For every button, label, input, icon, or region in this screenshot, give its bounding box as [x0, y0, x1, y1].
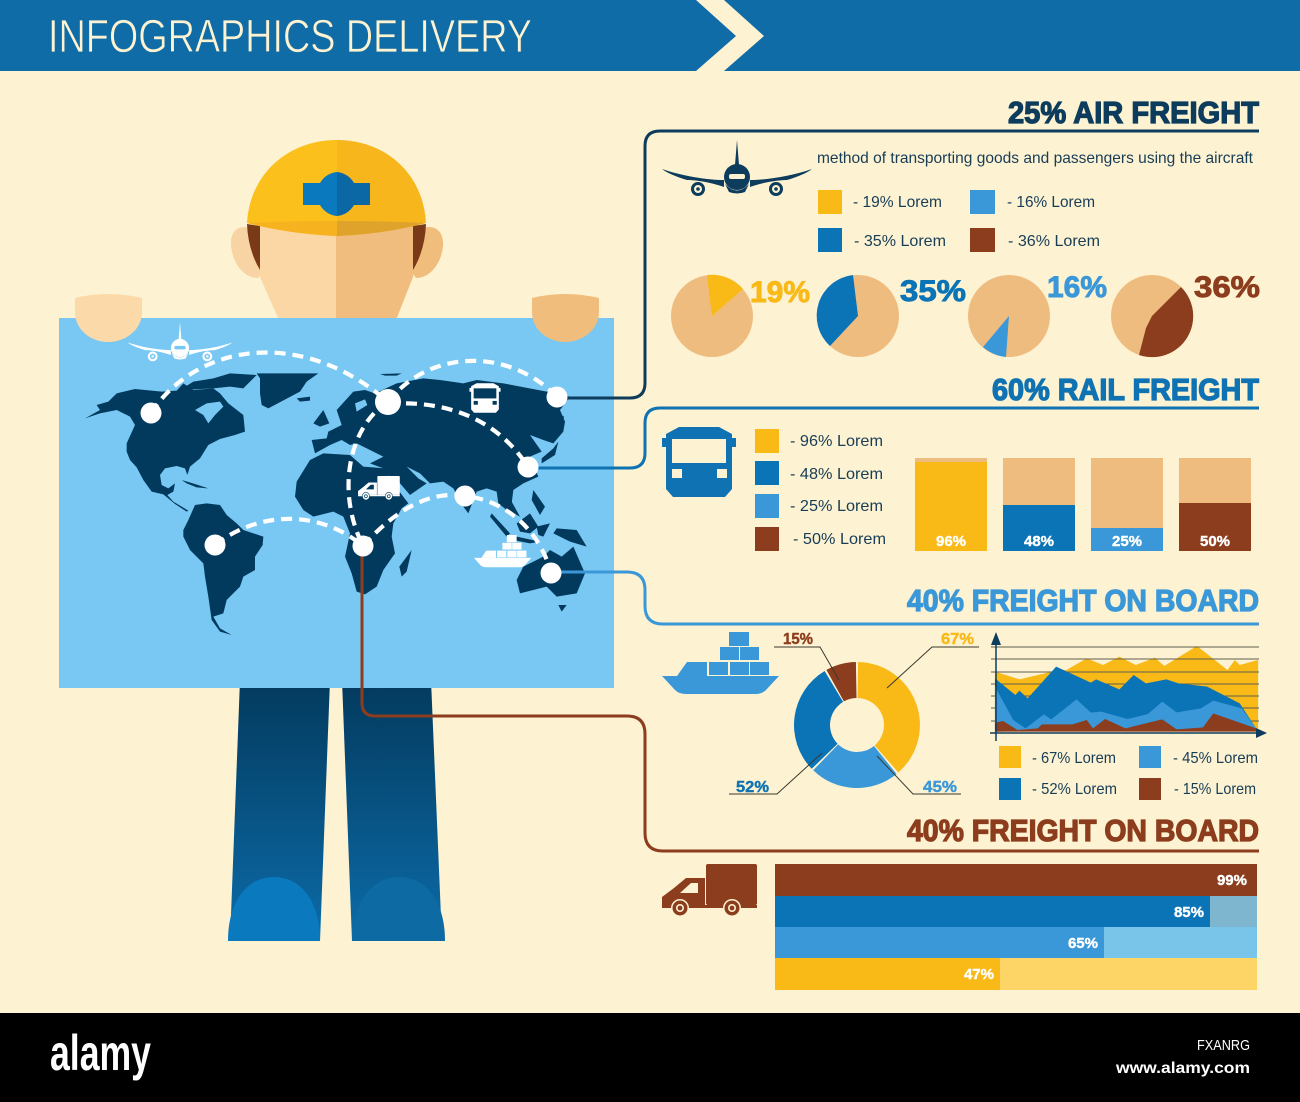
routes on map [140, 353, 568, 584]
legend [999, 746, 1258, 800]
donut chart [794, 662, 920, 788]
horizontal bars: 65% [1068, 935, 1098, 952]
heading: 40% FREIGHT ON BOARD [907, 813, 1259, 848]
legend: - 67% Lorem [1032, 750, 1116, 767]
map poster [59, 318, 614, 688]
stacked bars: 50% [1200, 533, 1230, 550]
legend: - 15% Lorem [1174, 781, 1256, 798]
legend: - 19% Lorem [853, 194, 942, 211]
footer band [0, 1013, 1300, 1102]
pie 35% [817, 275, 966, 357]
horizontal bars: 85% [1174, 904, 1204, 921]
area chart [990, 632, 1267, 741]
horizontal bars: 47% [964, 966, 994, 983]
legend: - 35% Lorem [854, 233, 946, 250]
donut labels: 45% [923, 779, 957, 796]
header banner: INFOGRAPHICS DELIVERY [48, 10, 532, 62]
helmet [247, 140, 426, 236]
legend: - 36% Lorem [1008, 233, 1100, 250]
worker figure [59, 140, 614, 941]
header banner [0, 0, 1300, 71]
legend: - 16% Lorem [1007, 194, 1095, 211]
donut labels [729, 631, 979, 796]
description: method of transporting goods and passengers using the aircraft [817, 150, 1254, 167]
legend: - 45% Lorem [1173, 750, 1258, 767]
stacked bars: 96% [936, 533, 966, 550]
icon: plane [662, 140, 812, 194]
legend: - 52% Lorem [1032, 781, 1117, 798]
legend: - 48% Lorem [790, 466, 883, 483]
icon: train [662, 427, 736, 497]
legend [755, 429, 886, 551]
panel: truck freight [662, 813, 1259, 990]
legend: - 96% Lorem [790, 433, 883, 450]
footer band: FXANRG [1197, 1037, 1250, 1054]
pie 16% [968, 271, 1107, 357]
stacked bars: 48% [1024, 533, 1054, 550]
pie 19%: 19% [750, 276, 810, 309]
world map: eurasia, africa, oceania [295, 373, 587, 612]
horizontal bars [775, 864, 1257, 990]
legend: - 50% Lorem [793, 531, 886, 548]
panel: air freight [662, 95, 1260, 357]
legs [228, 680, 445, 941]
pie 36%: 36% [1194, 271, 1260, 304]
world map: americas [85, 373, 318, 635]
footer band: alamy [50, 1025, 151, 1081]
icon: truck [662, 864, 757, 917]
stacked bars: 25% [1112, 533, 1142, 550]
connector: rail freight [528, 408, 1259, 468]
horizontal bars: 99% [1217, 872, 1247, 889]
connector: freight on board [550, 572, 1259, 624]
map icon: plane [128, 322, 232, 360]
heading: 60% RAIL FREIGHT [992, 372, 1259, 407]
heading: 40% FREIGHT ON BOARD [907, 583, 1259, 618]
panel: rail freight [662, 372, 1259, 551]
donut labels: 15% [783, 631, 813, 648]
panel: freight on board [662, 583, 1267, 800]
donut labels: 52% [736, 779, 769, 796]
donut labels: 67% [941, 631, 974, 648]
heading: 25% AIR FREIGHT [1008, 95, 1259, 130]
map icon: truck [358, 476, 400, 500]
face [247, 222, 426, 320]
connector: air freight [557, 131, 1259, 398]
legend [818, 190, 1100, 252]
connector: truck freight [362, 545, 1259, 851]
stacked bars [915, 458, 1251, 551]
ears [231, 227, 443, 278]
hands [75, 294, 599, 342]
map icon: train [469, 383, 501, 413]
map icon: ship [474, 535, 531, 567]
pie 16%: 16% [1047, 271, 1107, 304]
icon: ship [662, 632, 779, 694]
pie 19% [671, 275, 810, 357]
footer band: www.alamy.com [1115, 1060, 1250, 1077]
pie 36% [1111, 271, 1260, 357]
pie 35%: 35% [900, 275, 966, 308]
legend: - 25% Lorem [790, 498, 883, 515]
